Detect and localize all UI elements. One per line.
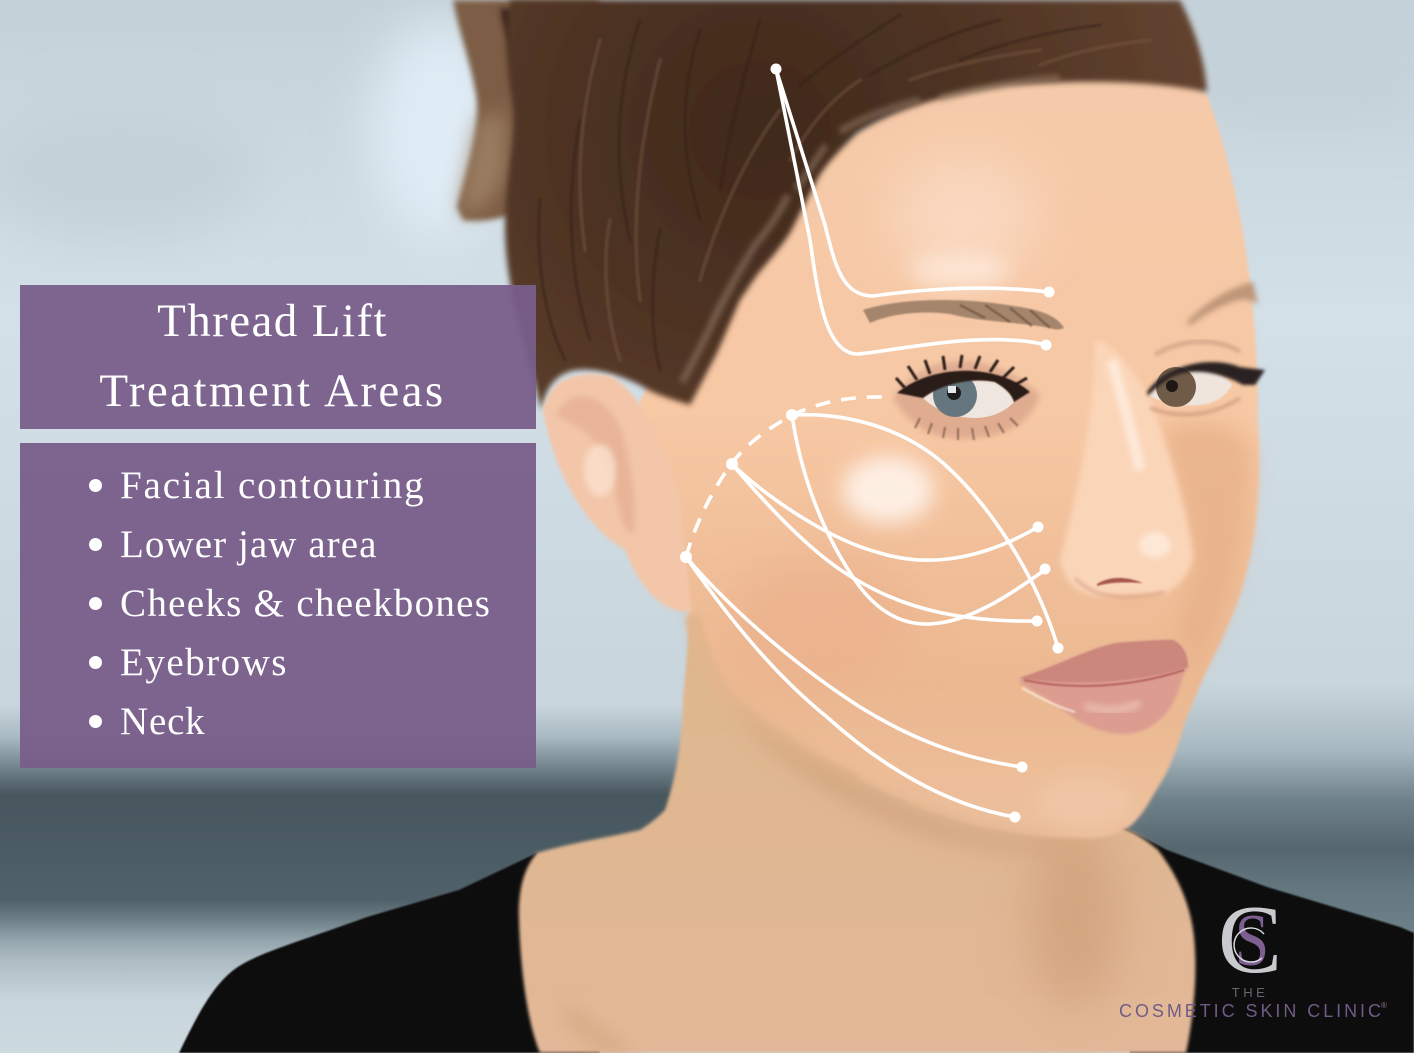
soft hairline fringe <box>682 78 1060 382</box>
panel: treatment areas list <box>20 443 536 768</box>
chin highlight <box>1035 775 1135 825</box>
logo: CS monogram and clinic name: COSMETIC SKIN CLINIC <box>1119 1001 1381 1021</box>
shaded far cheek <box>1160 422 1252 670</box>
soft jaw blend <box>692 615 856 782</box>
face <box>637 70 1259 838</box>
cheek highlight <box>842 456 934 524</box>
bullet <box>89 479 102 492</box>
hair bun <box>453 0 600 221</box>
neck and chest <box>519 590 1195 1053</box>
list item: Cheeks & cheekbones <box>120 582 491 625</box>
ear <box>543 374 692 612</box>
list item: Lower jaw area <box>120 523 378 566</box>
logo: CS monogram and clinic name: ® <box>1381 1001 1387 1010</box>
black top <box>179 825 1414 1053</box>
nose <box>1060 340 1193 597</box>
jaw shadow on neck <box>729 705 1086 851</box>
list item: Eyebrows <box>120 641 288 684</box>
list item: Facial contouring <box>120 464 425 507</box>
list item: Neck <box>120 700 206 743</box>
bullet <box>89 715 102 728</box>
forehead threads <box>776 69 1049 354</box>
hair strands <box>539 15 1150 370</box>
bullet <box>89 597 102 610</box>
heading line two: Treatment Areas <box>99 365 446 417</box>
left eyebrow <box>863 300 1064 330</box>
logo: CS monogram and clinic name: C <box>1218 886 1282 993</box>
panel: title <box>20 285 536 429</box>
thread end points <box>680 64 1064 822</box>
forehead highlight <box>890 155 1040 286</box>
hair <box>505 0 1207 410</box>
bullet <box>89 656 102 669</box>
cheek threads <box>732 415 1058 648</box>
lips <box>1020 640 1188 734</box>
thread lines <box>686 69 1058 817</box>
collarbone shadow <box>565 1010 625 1053</box>
neck side shadow <box>1033 820 1117 1010</box>
bullet <box>89 538 102 551</box>
logo: CS monogram and clinic name: S <box>1235 900 1269 982</box>
logo: CS monogram and clinic name: THE <box>1232 985 1268 1000</box>
logo: CS monogram and clinic name <box>1119 886 1387 1021</box>
cheek blush <box>730 555 910 685</box>
right eye <box>1147 342 1265 415</box>
jaw threads <box>686 557 1022 817</box>
heading line one: Thread Lift <box>157 295 388 347</box>
right eyebrow <box>1187 282 1258 326</box>
left eye <box>893 355 1040 440</box>
dashed temple arc <box>686 397 885 557</box>
